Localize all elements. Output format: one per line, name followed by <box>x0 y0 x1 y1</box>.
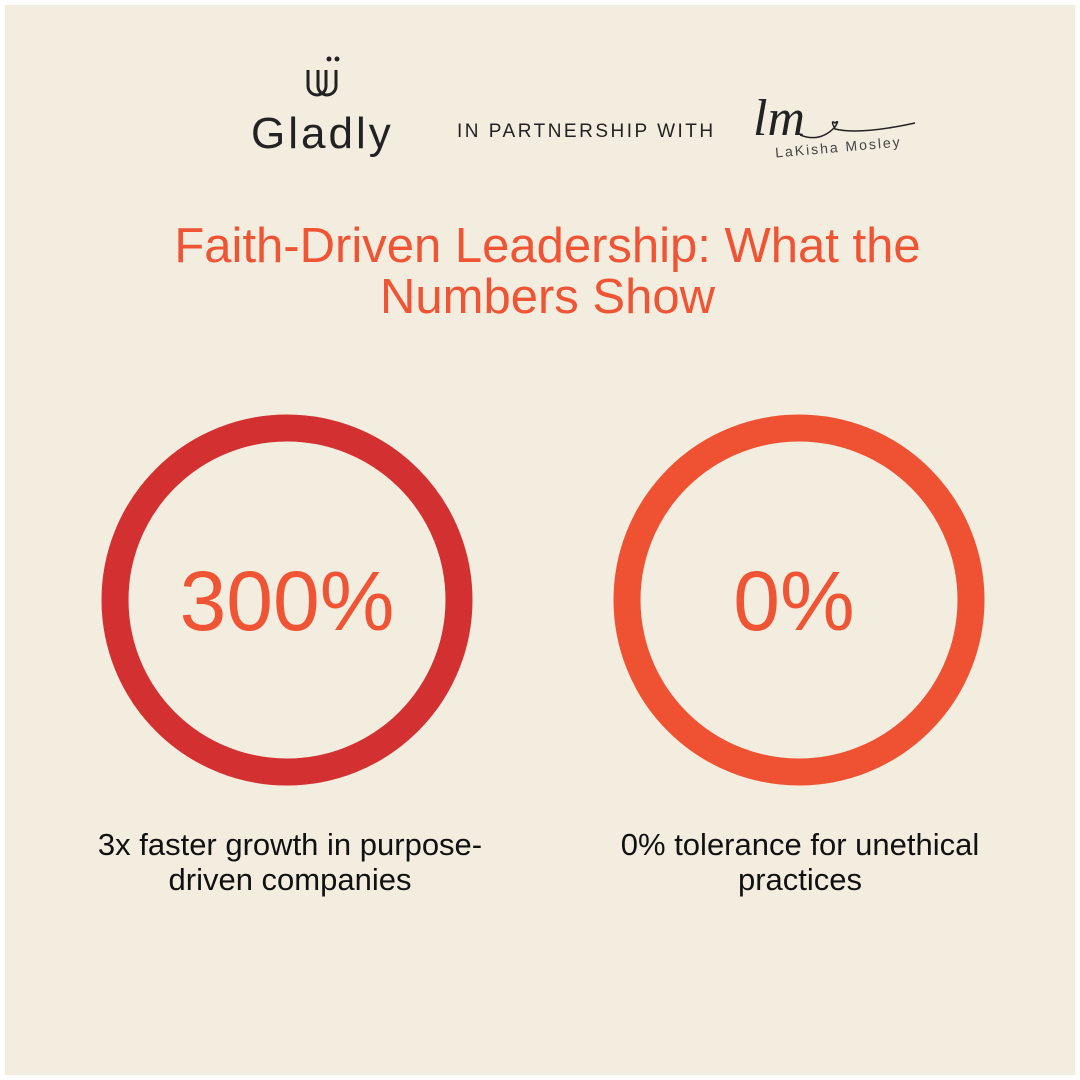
caption left: 3x faster growth in purpose- <box>98 827 482 862</box>
logo: LaKisha Mosley: LaKisha Mosley <box>775 134 902 160</box>
panel: 300% stat <box>98 414 482 897</box>
chart: ring right <box>614 414 984 786</box>
icon: Gladly mark <box>306 56 340 96</box>
caption right <box>621 827 979 897</box>
title <box>174 219 921 324</box>
caption right: practices <box>738 862 862 897</box>
caption left: driven companies <box>169 862 411 897</box>
title: Faith-Driven Leadership: What the <box>174 219 921 273</box>
logo: LaKisha Mosley <box>753 90 916 160</box>
number: 300%: 300% <box>180 554 394 648</box>
panel: 0% stat <box>614 414 984 897</box>
logo: Gladly <box>251 56 394 158</box>
caption left <box>98 827 482 897</box>
caption right: 0% tolerance for unethical <box>621 827 979 862</box>
title: Numbers Show <box>380 270 715 324</box>
text: in partnership with: IN PARTNERSHIP WITH <box>457 121 716 142</box>
text: Gladly: Gladly <box>251 109 394 158</box>
logo: LaKisha Mosley: lm <box>753 90 805 147</box>
number: 0%: 0% <box>733 554 855 648</box>
chart: ring left <box>102 414 472 786</box>
